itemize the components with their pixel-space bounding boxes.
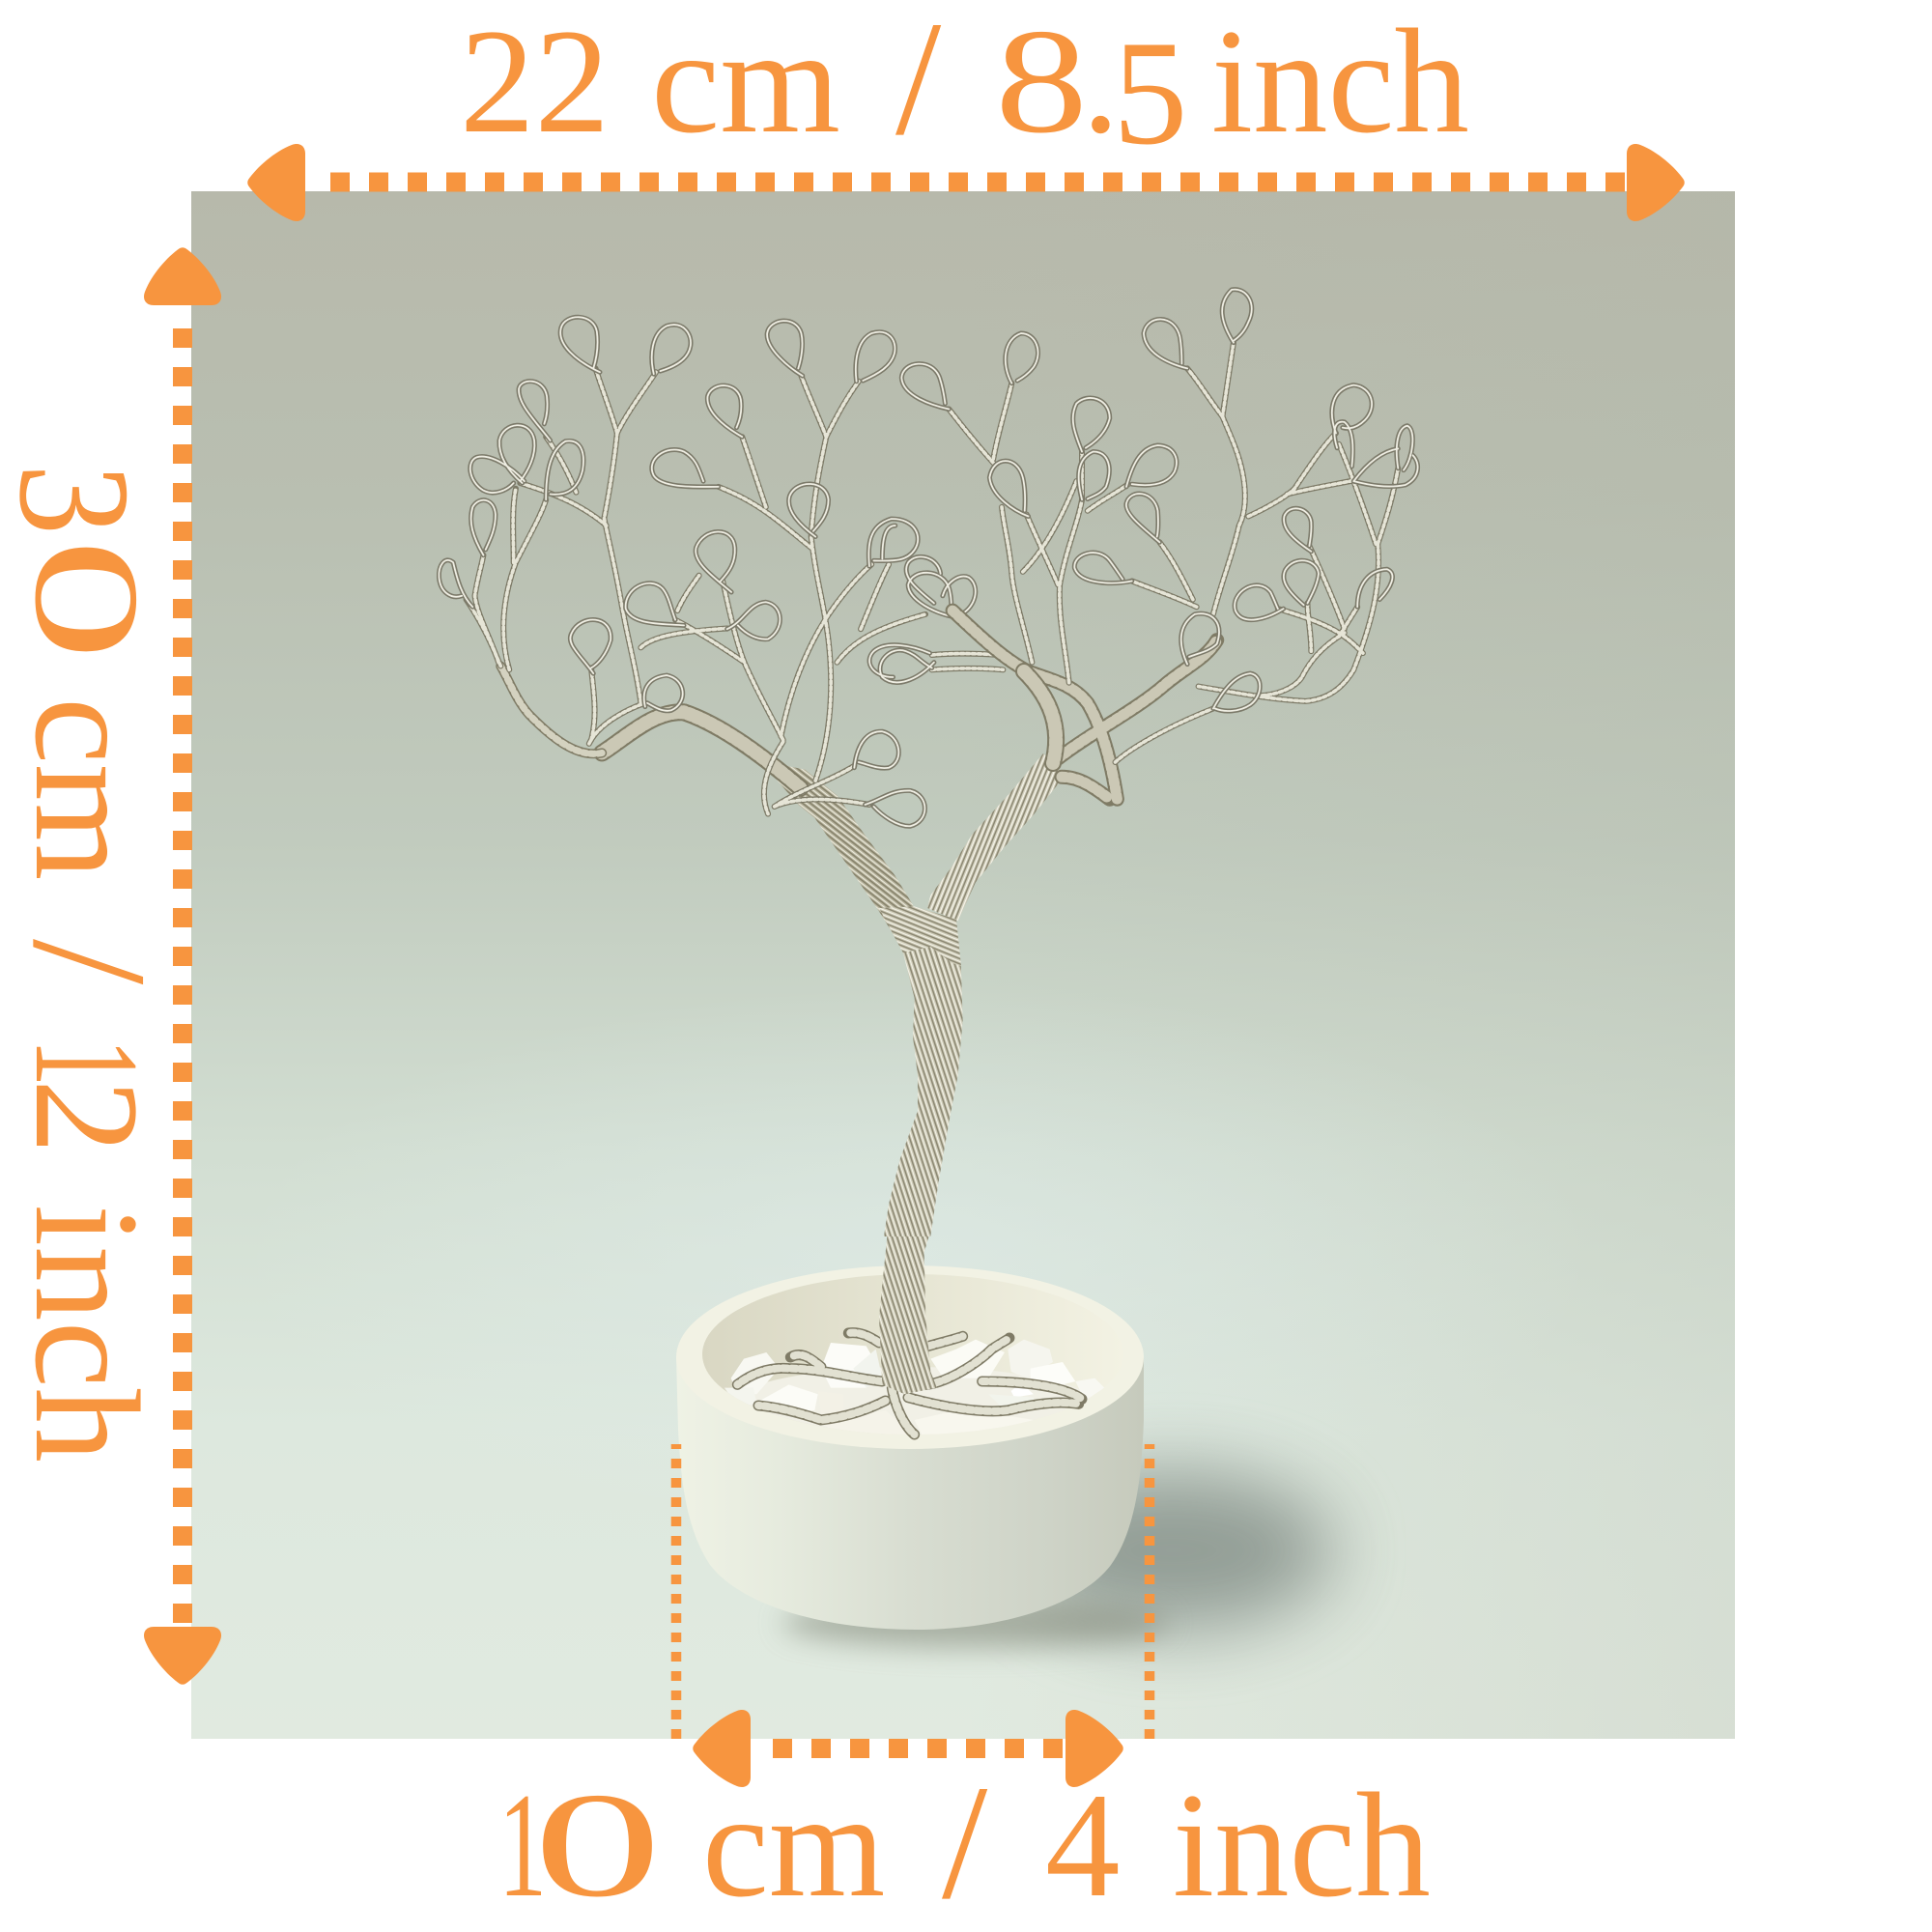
base label: 0 [533, 1762, 662, 1928]
base label: 1 [498, 1762, 547, 1928]
width label: . [1082, 0, 1120, 164]
height label: 0 [4, 538, 170, 661]
height label: / [0, 939, 181, 985]
upper arm connector [1024, 671, 1056, 763]
base label: inch [1173, 1762, 1431, 1928]
right arm [927, 753, 1060, 921]
left crown wires [439, 317, 1064, 826]
base label: / [942, 1751, 988, 1932]
width label: 5 [1113, 10, 1188, 176]
height label: cm [4, 697, 170, 880]
panel: product photo background [191, 191, 1735, 1739]
base dimension: arrow [693, 1710, 1123, 1787]
width label: cm [651, 0, 840, 164]
height dimension: arrow [144, 247, 221, 1685]
height label: 1 [4, 1038, 170, 1087]
pot rim [676, 1265, 1144, 1449]
base label: cm [702, 1762, 885, 1928]
left arm [773, 763, 918, 953]
pot interior [702, 1274, 1123, 1435]
height label: inch [4, 1205, 170, 1463]
lower trunk [879, 908, 963, 1236]
pot body [676, 1357, 1144, 1630]
wire roots [737, 1333, 1082, 1435]
height label: 2 [4, 1079, 170, 1153]
white stones [724, 1340, 1104, 1444]
pot [676, 1265, 1144, 1630]
width dimension: arrow [247, 144, 1685, 221]
right crown wires [901, 290, 1418, 799]
base label: 4 [1045, 1762, 1121, 1928]
tree: trunk [773, 753, 1060, 1394]
trunk base [879, 1236, 937, 1394]
width label: 22 [460, 0, 610, 164]
width label: inch [1211, 0, 1469, 164]
base dimension: guide lines [676, 1444, 1150, 1739]
tree: branches and loops [439, 290, 1418, 826]
trunk knot [879, 906, 961, 966]
width label: 8 [995, 0, 1088, 164]
